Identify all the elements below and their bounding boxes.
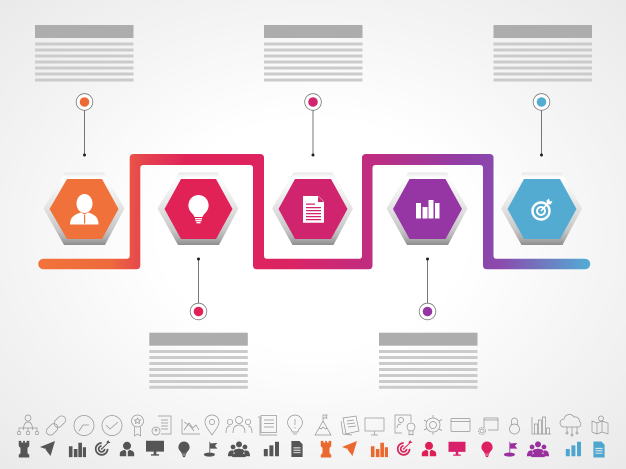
pin 3	[305, 94, 321, 156]
icon row: outline icons	[17, 414, 608, 437]
icon: map pin	[205, 415, 219, 435]
icon: target gray	[95, 440, 111, 456]
icon: bars gray	[69, 443, 86, 457]
icon: document list	[258, 416, 277, 435]
hexagon 5: blue target	[501, 172, 582, 245]
icon: person gray	[120, 442, 134, 456]
icon: flag purple	[504, 442, 517, 457]
icon: resume page	[152, 416, 171, 435]
text block 2	[149, 333, 248, 389]
hexagon 4: purple bars	[386, 172, 468, 245]
icon: map	[592, 416, 608, 434]
text block 3	[264, 25, 362, 82]
pin 4	[419, 258, 436, 320]
hexagon 3: pink document	[272, 172, 353, 245]
icon: chain link	[45, 414, 67, 437]
icon: bar outline	[532, 417, 551, 434]
icon: monitor gray	[146, 441, 164, 456]
icon: mountain flag	[315, 415, 331, 435]
icon: check circle	[102, 416, 122, 436]
timeline road	[38, 154, 590, 269]
icon: org chart	[17, 415, 39, 435]
icon: rook gray	[19, 441, 29, 458]
icon: people	[226, 416, 252, 433]
icon: plane orange	[342, 441, 357, 456]
icon: profile certificate	[395, 415, 415, 435]
text block 1	[35, 25, 134, 82]
icon: gear	[424, 415, 442, 435]
icon: line graph	[182, 419, 200, 434]
icon: steps gray	[264, 442, 279, 456]
icon: rook orange	[321, 441, 331, 458]
icon: steps blue	[566, 442, 581, 456]
icon: doc gray	[291, 441, 303, 457]
pin 1	[76, 94, 93, 156]
icon: flag gray	[204, 442, 217, 457]
icon: document	[303, 196, 324, 223]
icon: cloud network	[560, 415, 581, 436]
hexagon 1: orange person	[44, 172, 124, 245]
icon: bulb gray	[178, 442, 190, 457]
icon: bulb pink	[481, 442, 493, 457]
icon: bar chart	[416, 200, 440, 218]
icon: browser window	[451, 418, 470, 432]
icon: plane gray	[40, 441, 55, 456]
icon: target red	[397, 440, 413, 456]
icon: computer monitor	[365, 418, 384, 435]
icon: bars orange	[371, 443, 388, 457]
icon: idea bulb	[288, 415, 302, 434]
hexagon 2: crimson bulb	[158, 172, 238, 245]
icon: person	[70, 194, 98, 224]
icon: doc blue	[593, 442, 605, 458]
icon: person red	[422, 442, 436, 456]
icon: target	[532, 198, 552, 220]
icon: window settings	[478, 418, 498, 434]
icon: gauge circle	[74, 416, 94, 436]
icon: award ribbon	[132, 415, 144, 436]
icon: paper stack	[341, 416, 359, 435]
icon: padlock	[510, 418, 520, 434]
icon row: solid icons	[19, 440, 605, 458]
pin 2	[190, 258, 207, 320]
icon: light bulb	[188, 195, 209, 223]
text block 4	[379, 333, 478, 389]
pin 5	[533, 94, 550, 156]
icon: group gray	[228, 441, 250, 457]
text block 5	[494, 25, 592, 82]
icon: monitor pink	[448, 442, 466, 456]
icon: group purple	[527, 441, 549, 457]
